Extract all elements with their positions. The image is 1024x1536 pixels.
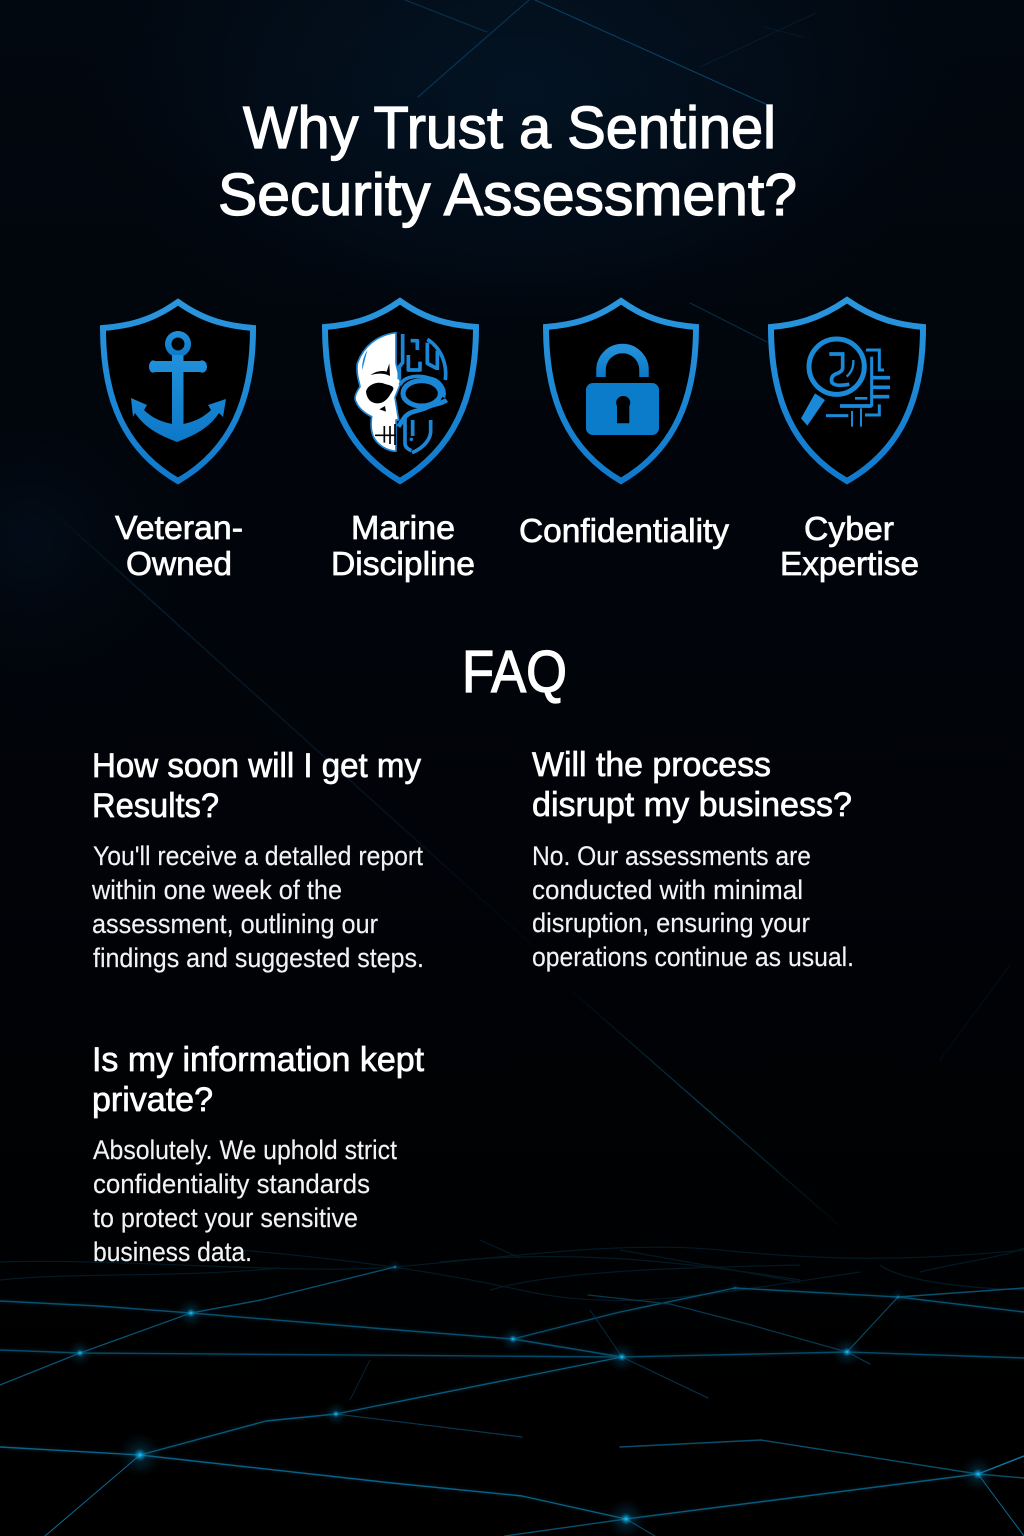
question: private? bbox=[92, 1081, 213, 1119]
panel: FAQ privacy bbox=[92, 1041, 425, 1267]
icon: magnifier and circuit shield bbox=[771, 300, 923, 481]
badge: veteran-owned bbox=[103, 302, 253, 582]
icon: half skull half circuit shield bbox=[325, 301, 476, 481]
answer: You'll receive a detalled report bbox=[93, 841, 423, 871]
label: marine discipline: Discipline bbox=[331, 545, 475, 582]
answer bbox=[532, 841, 854, 972]
label: veteran-owned: Owned bbox=[126, 545, 232, 582]
label: veteran-owned: Veteran- bbox=[115, 509, 243, 546]
label: cyber expertise: Cyber bbox=[804, 510, 894, 547]
label: cyber expertise: Expertise bbox=[780, 545, 919, 582]
label: marine discipline bbox=[331, 509, 475, 582]
answer: conducted with minimal bbox=[532, 875, 803, 905]
answer: disruption, ensuring your bbox=[532, 908, 810, 938]
title: Why Trust a Sentinel bbox=[243, 95, 776, 161]
badge: cyber expertise bbox=[771, 300, 923, 582]
icon: anchor shield bbox=[103, 302, 253, 481]
label: marine discipline: Marine bbox=[351, 509, 455, 546]
label: confidentiality: Confidentiality bbox=[519, 512, 730, 549]
label: cyber expertise bbox=[780, 510, 919, 582]
answer: assessment, outlining our bbox=[92, 909, 378, 939]
question: Will the process bbox=[532, 746, 771, 784]
badge: confidentiality bbox=[519, 301, 730, 549]
question bbox=[532, 746, 852, 824]
badge: marine discipline bbox=[325, 301, 476, 582]
label: veteran-owned bbox=[115, 509, 243, 582]
answer: within one week of the bbox=[91, 875, 342, 905]
panel: FAQ business disruption bbox=[532, 746, 854, 972]
answer: No. Our assessments are bbox=[532, 841, 811, 871]
answer bbox=[91, 841, 424, 973]
question: disrupt my business? bbox=[532, 786, 852, 824]
question: Is my information kept bbox=[92, 1041, 425, 1079]
answer: Absolutely. We uphold strict bbox=[93, 1135, 397, 1165]
answer: confidentiality standards bbox=[93, 1169, 370, 1199]
answer: to protect your sensitive bbox=[93, 1203, 358, 1233]
question: How soon will I get my bbox=[92, 747, 421, 785]
heading: FAQ: FAQ bbox=[462, 639, 567, 705]
question bbox=[92, 747, 421, 825]
question: Results? bbox=[92, 787, 219, 825]
icon: padlock shield bbox=[546, 301, 696, 481]
answer: operations continue as usual. bbox=[532, 942, 854, 972]
panel: FAQ results timing bbox=[91, 747, 424, 973]
answer: findings and suggested steps. bbox=[93, 943, 424, 973]
answer bbox=[93, 1135, 397, 1267]
panel: trust badges bbox=[103, 300, 923, 582]
title: Security Assessment? bbox=[218, 162, 797, 228]
answer: business data. bbox=[93, 1237, 252, 1267]
question bbox=[92, 1041, 425, 1119]
title bbox=[218, 95, 797, 228]
